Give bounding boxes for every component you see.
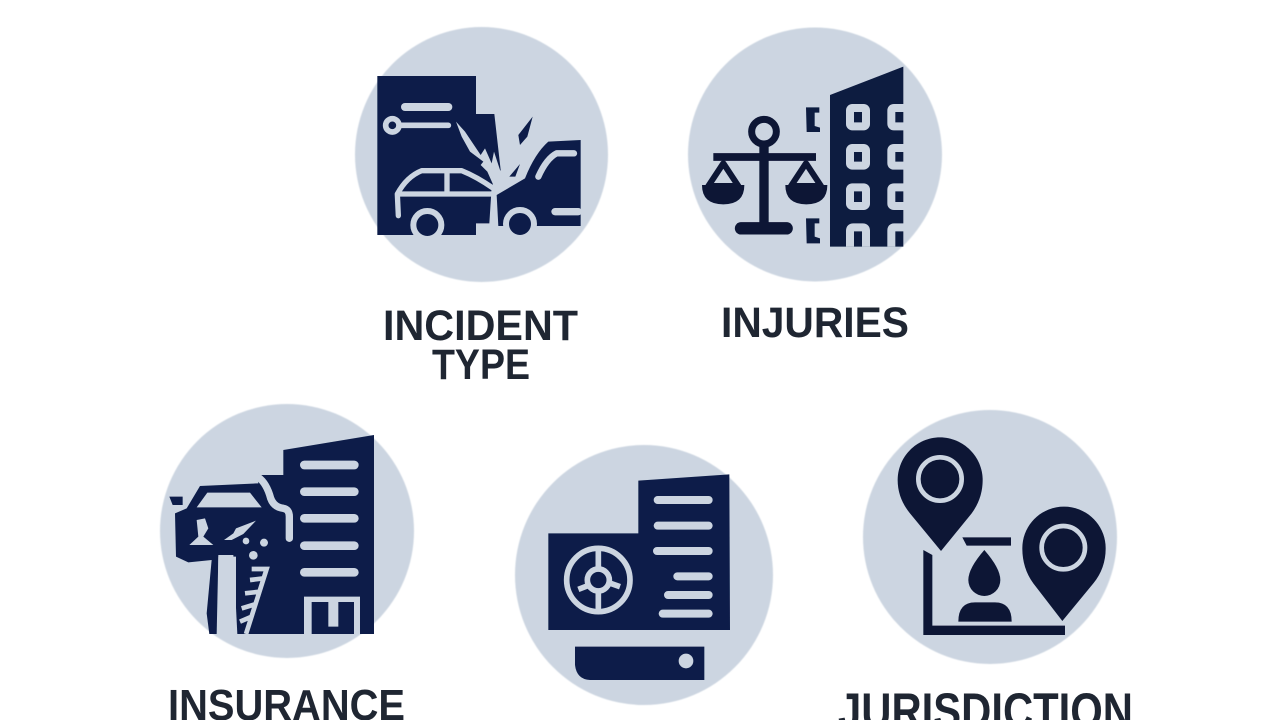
circle: middle background bbox=[515, 445, 773, 705]
icon: damaged car and building bbox=[169, 435, 374, 634]
icon: scales and building bbox=[702, 67, 904, 247]
panel: injuries bbox=[688, 28, 942, 347]
icon: document with wheel and card bbox=[548, 474, 730, 680]
circle: injuries background bbox=[688, 28, 942, 282]
circle: jurisdiction background bbox=[863, 410, 1117, 664]
icon: car crash and document bbox=[377, 76, 581, 239]
label: injuries: INJURIES bbox=[721, 299, 909, 347]
icon: map pins and venue bbox=[898, 437, 1106, 635]
panel: vehicle and documents bbox=[515, 445, 773, 705]
circle: insurance background bbox=[160, 404, 414, 658]
panel: insurance bbox=[160, 404, 414, 720]
label: incident type: TYPE bbox=[432, 341, 530, 389]
label: incident type bbox=[383, 302, 578, 389]
panel: jurisdiction bbox=[838, 410, 1133, 720]
circle: incident type background bbox=[355, 27, 608, 282]
label: incident type: INCIDENT bbox=[383, 302, 578, 350]
panel: incident type bbox=[355, 27, 608, 389]
